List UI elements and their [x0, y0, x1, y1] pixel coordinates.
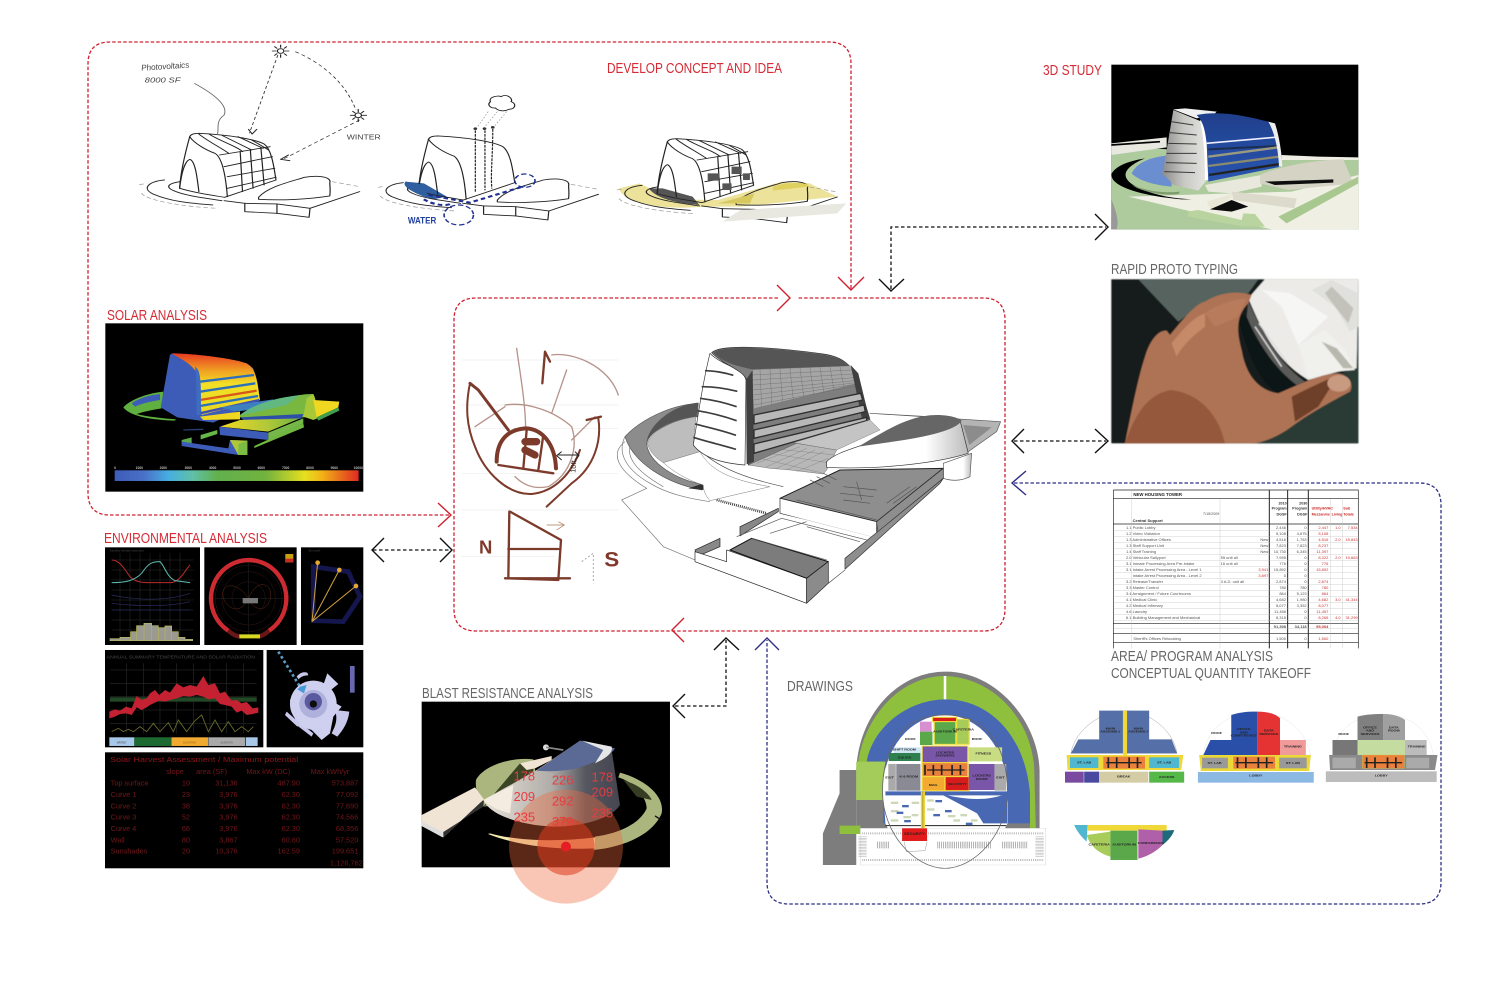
table: area program analysis: 11,397: [1316, 549, 1329, 554]
table: solar harvest assessment: 10: [182, 779, 190, 788]
plan level D: AUDITORIUM: [1112, 843, 1136, 846]
plan level B: ST. LAB: [1208, 761, 1222, 765]
chart: annual summary temperature and solar radiation: [105, 650, 263, 747]
table: area program analysis: 780: [1322, 585, 1329, 590]
chart: temperature and radiation lines: Monthly climate summary: [110, 549, 144, 553]
blast pressure readings: 226: [552, 773, 573, 788]
main floor plan: SHIFT ROOM: [892, 748, 916, 752]
plan level B: AND: [1240, 731, 1248, 734]
chart: sun angle fan: [301, 547, 363, 645]
plan level A: MAIN: [1134, 727, 1144, 730]
table: solar harvest assessment: 62.30: [282, 813, 300, 822]
table: area program analysis: DGSF: [1276, 512, 1287, 516]
table: solar harvest assessment: 74,566: [336, 813, 358, 822]
parking lot: SECURITY: [904, 832, 926, 836]
table: area program analysis: 1.3 Administrative Offices: [1126, 537, 1171, 542]
table: area program analysis: 4.2 Medical Infirmary: [1126, 603, 1163, 608]
table: solar harvest assessment: 3,976: [219, 801, 238, 810]
plan level A: ASSEMBLY: [1128, 730, 1149, 734]
table: area program analysis: 1,500: [1318, 636, 1329, 641]
main floor plan: CAFETERIA: [953, 728, 975, 732]
table: area program analysis: Program: [1292, 507, 1308, 511]
table: area program analysis: DGSF: [1297, 512, 1308, 516]
plan level C: TRAINING: [1408, 745, 1426, 748]
panel: solar analysis render: [105, 323, 363, 492]
table: area program analysis: 31,299: [1345, 615, 1358, 620]
table: area program analysis: 3 A.D. unit all: [1221, 579, 1244, 584]
plan level C: LOBBY: [1375, 774, 1389, 778]
table: area program analysis: 3.1 Inmate Processing Area Pre-Intake: [1126, 561, 1195, 566]
plan level B: SERVICES: [1259, 732, 1279, 736]
table: solar harvest assessment: 10,376: [215, 847, 238, 856]
rooms: [922, 717, 969, 791]
table: area program analysis: 2,874: [1276, 579, 1287, 584]
chart: temperature and radiation lines: [105, 547, 200, 645]
table: area program analysis: 2,874: [1318, 579, 1329, 584]
table: area program analysis: 19,663: [1345, 555, 1358, 560]
table: area program analysis: 5,108: [1318, 531, 1329, 536]
table: area program analysis: 776: [1322, 561, 1329, 566]
table: solar harvest assessment: area (SF): [196, 767, 227, 776]
table: area program analysis: Sub: [1343, 507, 1351, 511]
table: area program analysis: 41,344: [1345, 597, 1358, 602]
table: area program analysis: Mezzanine: [1312, 512, 1330, 516]
table: area program analysis: 0: [1284, 573, 1287, 578]
table: solar harvest assessment: 77,690: [336, 801, 358, 810]
table: area program analysis: 7,955: [1276, 555, 1287, 560]
plan level C: OFFICE: [1363, 726, 1378, 729]
table: area program analysis: 10,730: [1274, 549, 1287, 554]
solar colour scale legend: 5000: [233, 466, 241, 470]
table: solar harvest assessment: 1,128,762: [330, 858, 363, 867]
table: solar harvest assessment: Wall: [111, 835, 125, 844]
heading: solar analysis: SOLAR ANALYSIS: [107, 307, 207, 324]
table: area program analysis: 0: [1304, 579, 1307, 584]
blast pressure readings: 292: [552, 793, 573, 808]
table: solar harvest assessment: 23: [182, 790, 190, 799]
table: solar harvest assessment: 62.30: [282, 801, 300, 810]
connector: central frame (red dashed): [454, 285, 1005, 642]
arrow: 3D study link: [879, 214, 1108, 291]
table: area program analysis: [1113, 490, 1358, 648]
main floor plan: MAIL: [929, 783, 938, 787]
table: area program analysis: 7/15/2009: [1203, 512, 1219, 516]
table: area program analysis: 1,753: [1297, 537, 1307, 542]
solar colour scale legend: 10000: [354, 466, 363, 470]
main floor plan: [823, 672, 1046, 868]
table: area program analysis: 11,457: [1316, 609, 1329, 614]
table: area program analysis: 780: [1300, 585, 1307, 590]
table: area program analysis: 7,823: [1297, 543, 1307, 548]
solar colour scale legend: 9000: [331, 466, 338, 470]
heading: drawings: DRAWINGS: [787, 678, 853, 695]
panel: central building with sketch: [462, 347, 1001, 603]
table: area program analysis: 4.0: [1335, 615, 1341, 620]
blast pressure readings: 209: [513, 789, 535, 804]
table: area program analysis: 6,345: [1297, 549, 1307, 554]
table: area program analysis: 0: [1304, 525, 1307, 530]
table: area program analysis: 3,352: [1297, 603, 1307, 608]
table: area program analysis: 1,500: [1276, 636, 1287, 641]
table: area program analysis: Living: [1332, 512, 1342, 516]
panel: environmental analysis charts: [105, 547, 363, 868]
table: area program analysis: 0: [1304, 561, 1307, 566]
table: solar harvest assessment: Sunshades: [111, 847, 148, 856]
table: area program analysis: 0: [1304, 573, 1307, 578]
table: solar harvest assessment: 3,976: [219, 813, 238, 822]
panel: rapid prototyping photo: [1111, 279, 1358, 443]
connector: drawings loop (blue dashed frame): [755, 471, 1441, 904]
main floor plan: FITNESS: [975, 752, 992, 756]
table: solar harvest assessment: 38: [182, 801, 190, 810]
main floor plan: LOCKERS: [973, 774, 992, 778]
plan level A: BREAK: [1117, 775, 1131, 778]
table: area program analysis: 776: [1279, 561, 1287, 566]
table: area program analysis: 7,534: [1348, 525, 1358, 530]
chart: annual summary temperature and solar radiation: winter: [117, 740, 127, 744]
table: area program analysis: 55 unit all: [1221, 555, 1238, 560]
blast pressure readings: 379: [552, 814, 573, 829]
arrow: blast analysis link: [673, 638, 739, 718]
plan level A: [1065, 711, 1184, 783]
table: area program analysis: New: [1260, 537, 1268, 542]
main floor plan: ROOF: [905, 737, 916, 741]
table: area program analysis: 1.3 Staff Support Unit: [1126, 543, 1165, 548]
table: solar harvest assessment: 80: [182, 835, 190, 844]
sketches: concept drawings: [137, 45, 846, 226]
main floor plan: SECURITY: [948, 782, 968, 786]
table: area program analysis: 4,682: [1318, 597, 1329, 602]
table: area program analysis: 91,398: [1274, 624, 1287, 629]
table: solar harvest assessment: Curve 4: [111, 824, 136, 833]
heading: environmental analysis: ENVIRONMENTAL ANALYSIS: [104, 530, 267, 547]
sketch: brown site plan: [462, 348, 619, 583]
table: area program analysis: 7,823: [1276, 543, 1287, 548]
table: area program analysis: 2,446: [1276, 525, 1287, 530]
solar colour scale legend: 4000: [209, 466, 217, 470]
icon: summer sun: [272, 45, 289, 57]
panel: 3D study render: [1111, 65, 1358, 229]
plan level C: ROOF: [1338, 732, 1349, 736]
table: solar harvest assessment: 57,520: [336, 835, 358, 844]
table: area program analysis: 1.4 Staff Training: [1126, 549, 1156, 554]
table: solar harvest assessment: 68,356: [336, 824, 358, 833]
plan level B: ROOF: [1211, 731, 1222, 735]
table: area program analysis: Program: [1272, 507, 1287, 511]
plan level B: OFFICE: [1237, 727, 1251, 731]
table: area program analysis: 1.2 Video Visitation: [1126, 531, 1160, 536]
sketch: photovoltaic sun study: [137, 45, 381, 217]
table: area program analysis: 8,265: [1318, 615, 1329, 620]
table: area program analysis: 8,237: [1318, 543, 1329, 548]
solar colour scale legend: 2000: [160, 466, 167, 470]
plan level C: DATA: [1389, 726, 1399, 729]
table: solar harvest assessment: 487.90: [278, 779, 300, 788]
table: solar harvest assessment: 31,136: [215, 779, 238, 788]
chart: annual summary temperature and solar radiation: ANNUAL SUMMARY TEMPERATURE AND SOLAR RADIATION: [107, 655, 255, 661]
parking lot: [860, 826, 1046, 865]
table: area program analysis: New: [1260, 549, 1268, 554]
table: area program analysis: 95,004: [1316, 624, 1329, 629]
sketch: brown site plan: N: [479, 536, 492, 557]
table: area program analysis: 2.0 Vehicular Sallyport: [1126, 555, 1167, 560]
table: area program analysis: 780: [1279, 585, 1287, 590]
table: area program analysis: 3.1 Intake Arrest Processing Area - Level 1: [1126, 567, 1202, 572]
blast pressure readings: 178: [513, 769, 535, 784]
table: solar harvest assessment: Curve 3: [111, 813, 136, 822]
plan level A: ST. LAB: [1077, 761, 1092, 764]
table: solar harvest assessment: 66: [182, 824, 190, 833]
plan level B: DATA: [1264, 729, 1274, 733]
table: solar harvest assessment: Top surface: [111, 779, 149, 788]
table: area program analysis: 2.0: [1335, 555, 1341, 560]
table: solar harvest assessment: slope: [166, 767, 184, 776]
chart: annual summary temperature and solar radiation: autumn: [221, 740, 233, 744]
solar colour scale legend: 6000: [258, 466, 265, 470]
plan level A: ASSEMBLY: [1100, 730, 1121, 734]
table: area program analysis: 864: [1322, 591, 1329, 596]
table: area program analysis: 0: [1304, 555, 1307, 560]
heading: rapid proto typing: RAPID PROTO TYPING: [1111, 261, 1238, 278]
main floor plan: LOCKERS: [936, 751, 955, 754]
table: area program analysis: 4,675: [1297, 531, 1307, 536]
main floor plan: K-9 ROOM: [899, 775, 918, 778]
table: solar harvest assessment: 3,976: [219, 790, 238, 799]
table: area program analysis: 8,322: [1318, 555, 1329, 560]
table: solar harvest assessment: Max kWh/yr: [311, 767, 350, 776]
main floor plan: ROOF: [972, 737, 982, 741]
table: solar harvest assessment: 3,867: [219, 835, 238, 844]
table: area program analysis: 15,843: [1345, 537, 1358, 542]
heading: conceptual quantity takeoff: CONCEPTUAL QUANTITY TAKEOFF: [1111, 665, 1311, 682]
plan level B: CONFERENCE: [1231, 734, 1258, 738]
solar colour scale legend: 0: [114, 466, 116, 470]
plan level C: ROOM: [1388, 729, 1400, 733]
table: area program analysis: 16 unit all: [1221, 561, 1238, 566]
table: area program analysis: 4.6 Laundry: [1126, 609, 1147, 614]
plan level C: [1326, 714, 1438, 782]
chart: radial solar dial: [204, 547, 297, 645]
table: solar harvest assessment: 77,092: [336, 790, 358, 799]
table: area program analysis: 1.0: [1335, 525, 1341, 530]
table: solar harvest assessment: 3,976: [219, 824, 238, 833]
solar colour scale legend: 8000: [306, 466, 314, 470]
table: solar harvest assessment: 20: [182, 847, 190, 856]
table: solar harvest assessment: 62.30: [282, 790, 300, 799]
main floor plan: AUDITORIUM: [933, 730, 957, 734]
table: solar harvest assessment: Curve 1: [111, 790, 136, 799]
main floor plan: EXIT: [885, 776, 895, 779]
table: solar harvest assessment: 52: [182, 813, 190, 822]
arrow: rapid prototyping link: [1012, 429, 1108, 453]
table: area program analysis: 5,108: [1276, 531, 1287, 536]
table: solar harvest assessment: [105, 752, 363, 868]
solar colour scale legend: [114, 466, 363, 481]
table: area program analysis: Sheriff's Offices Relocating: [1133, 636, 1181, 641]
sketch: photovoltaic sun study: 8000 SF: [145, 76, 181, 84]
table: area program analysis: 34,118: [1295, 624, 1307, 629]
heading: area program analysis: AREA/ PROGRAM ANALYSIS: [1111, 648, 1273, 665]
table: area program analysis: 3.2 Release/Transfer: [1126, 579, 1164, 584]
sketch: photovoltaic sun study: WINTER: [347, 133, 381, 141]
sketch: rain water collection: WATER: [408, 216, 436, 226]
sketch: watercolour concept: [614, 139, 846, 223]
table: solar harvest assessment: 62.30: [282, 824, 300, 833]
connector: concept loop (red dashed frame): [88, 42, 864, 527]
solar model: [123, 353, 339, 455]
table: area program analysis: 3.4 Arraignment / Future Courtrooms: [1126, 591, 1191, 596]
main floor plan: SHOWERS: [935, 754, 955, 758]
table: area program analysis: 1,980: [1297, 597, 1307, 602]
blast pressure readings: 178: [591, 769, 613, 784]
table: area program analysis: 3.3 Master Control: [1126, 585, 1159, 590]
table: area program analysis: 8,077: [1276, 603, 1287, 608]
table: area program analysis: 0: [1304, 567, 1307, 572]
table: area program analysis: NEW HOUSING TOWER: [1133, 492, 1183, 497]
blast pressure readings: [513, 769, 613, 829]
drawing: central building model: [617, 347, 1001, 603]
plan level A: ST. LAB: [1157, 761, 1172, 764]
plan level B: ST. LAB: [1286, 761, 1301, 765]
table: solar harvest assessment: 199,651: [332, 847, 358, 856]
table: area program analysis: 8,077: [1318, 603, 1329, 608]
sketch: photovoltaic sun study: Photovoltaics: [141, 61, 190, 73]
solar colour scale legend: 7000: [282, 466, 289, 470]
table: area program analysis: 15,892: [1274, 567, 1287, 572]
table: area program analysis: 0: [1304, 615, 1307, 620]
plan level D: [1074, 825, 1175, 860]
main floor plan: ROOM: [976, 777, 988, 781]
panel: blast resistance analysis: [422, 702, 670, 904]
table: area program analysis: 2010: [1279, 501, 1287, 505]
plan level C: SERVICES: [1361, 732, 1380, 736]
table: area program analysis: 864: [1279, 591, 1287, 596]
table: area program analysis: 0: [1304, 636, 1307, 641]
sketch: brown site plan: 10ft: [568, 460, 578, 473]
table: area program analysis: 2.0: [1335, 537, 1341, 542]
main floor plan: SQUAD: [898, 756, 912, 760]
plan level A: ACCESS: [1159, 775, 1175, 779]
table: area program analysis: 11,456: [1274, 609, 1287, 614]
plan level B: [1198, 712, 1314, 783]
chart: annual summary temperature and solar radiation: summer: [183, 740, 197, 744]
table: area program analysis: 1.1 Public Lobby: [1126, 525, 1155, 530]
table: solar harvest assessment: 162.59: [278, 847, 300, 856]
blast model: [422, 741, 663, 850]
table: area program analysis: Utility/HVAC: [1312, 507, 1333, 511]
icon: winter sun: [350, 109, 366, 122]
solar colour scale legend: 3000: [185, 466, 192, 470]
table: area program analysis: 2030: [1299, 501, 1307, 505]
table: area program analysis: New: [1260, 543, 1268, 548]
table: area program analysis: 0: [1304, 609, 1307, 614]
plan level D: CONFERENCE: [1138, 841, 1165, 845]
panel: drawings floor plans: [823, 672, 1438, 868]
table: area program analysis: Central Support: [1133, 518, 1163, 523]
table: area program analysis: 3,941: [1258, 567, 1269, 572]
table: solar harvest assessment: Max kW (DC): [246, 767, 290, 776]
plan level A: MAIN: [1106, 727, 1116, 730]
chart: sun angle fan: Sun path: [308, 549, 321, 553]
table: area program analysis: 4,516: [1276, 537, 1287, 542]
table: area program analysis: 4,516: [1318, 537, 1329, 542]
table: area program analysis: 3,897: [1258, 573, 1269, 578]
sketch: brown site plan: S: [604, 548, 619, 572]
table: area program analysis: Intake Arrest Processing Area - Level 2: [1133, 573, 1202, 578]
blast pressure readings: 235: [591, 805, 613, 820]
table: solar harvest assessment: Solar Harvest Assessment / Maximum potential: [110, 755, 299, 764]
heading: blast resistance analysis: BLAST RESISTANCE ANALYSIS: [422, 685, 593, 702]
table: area program analysis: 5,123: [1297, 591, 1307, 596]
heading: develop concept and idea: DEVELOP CONCEPT AND IDEA: [607, 60, 782, 77]
plan level B: TRAINING: [1284, 745, 1302, 748]
arrow: environmental analysis link: [372, 538, 452, 562]
table: area program analysis: 8,315: [1276, 615, 1287, 620]
blast pressure readings: 209: [591, 785, 613, 800]
solar colour scale legend: 1000: [136, 466, 143, 470]
table: solar harvest assessment: Curve 2: [111, 801, 136, 810]
table: solar harvest assessment: 60.60: [282, 835, 300, 844]
table: area program analysis: Totals: [1343, 512, 1354, 516]
sketch: rain water collection: [376, 96, 598, 226]
plan level D: CAFETERIA: [1089, 843, 1110, 846]
main floor plan: EXIT: [996, 776, 1006, 779]
plan level B: LOBBY: [1249, 774, 1263, 778]
table: solar harvest assessment: 573,887: [332, 779, 358, 788]
heading: 3D study: 3D STUDY: [1043, 62, 1102, 79]
table: area program analysis: 4,682: [1276, 597, 1287, 602]
table: area program analysis: 4.1 Medical Clinic: [1126, 597, 1157, 602]
chart: radial shading diagram: [267, 650, 363, 747]
table: area program analysis: 15,892: [1316, 567, 1329, 572]
plan level C: AND: [1366, 729, 1375, 733]
blast pressure readings: 235: [513, 810, 535, 825]
table: area program analysis: 6.1 Building Management and Mechanical: [1126, 615, 1200, 620]
blast radius circles: [509, 790, 623, 904]
table: area program analysis: 3.0: [1335, 597, 1341, 602]
table: area program analysis: 2,447: [1318, 525, 1329, 530]
